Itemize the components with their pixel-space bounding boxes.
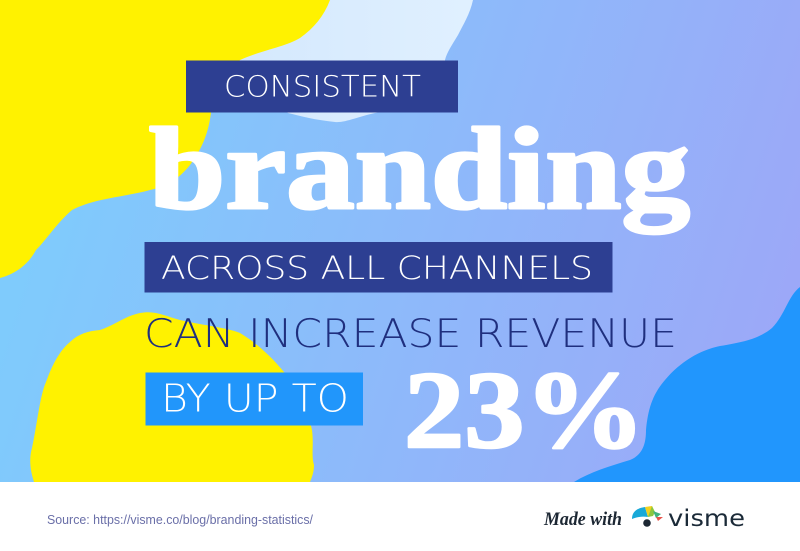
text: can increase revenue: CAN INCREASE REVENUE xyxy=(144,312,677,357)
text: across all channels: ACROSS ALL CHANNELS xyxy=(161,249,593,287)
visme wordmark: visme xyxy=(668,506,745,532)
box: by up to xyxy=(146,372,363,426)
made with text: Made with xyxy=(543,509,622,530)
yellow blob bottom xyxy=(30,312,314,482)
title word: branding: branding xyxy=(149,105,690,234)
text: consistent: CONSISTENT xyxy=(224,70,421,104)
box: consistent xyxy=(186,60,458,112)
text: by up to: BY UP TO xyxy=(161,376,349,420)
statistic: 23%: 23% xyxy=(404,349,645,471)
source text: Source: https://visme.co/blog/branding-statistics/ xyxy=(47,512,313,527)
box: across all channels xyxy=(144,242,612,292)
footer panel xyxy=(0,482,800,551)
blue blob bottom right xyxy=(574,287,800,482)
yellow blob top left xyxy=(0,0,330,278)
pale blue blob xyxy=(230,0,473,122)
icon: visme logo xyxy=(632,506,663,527)
